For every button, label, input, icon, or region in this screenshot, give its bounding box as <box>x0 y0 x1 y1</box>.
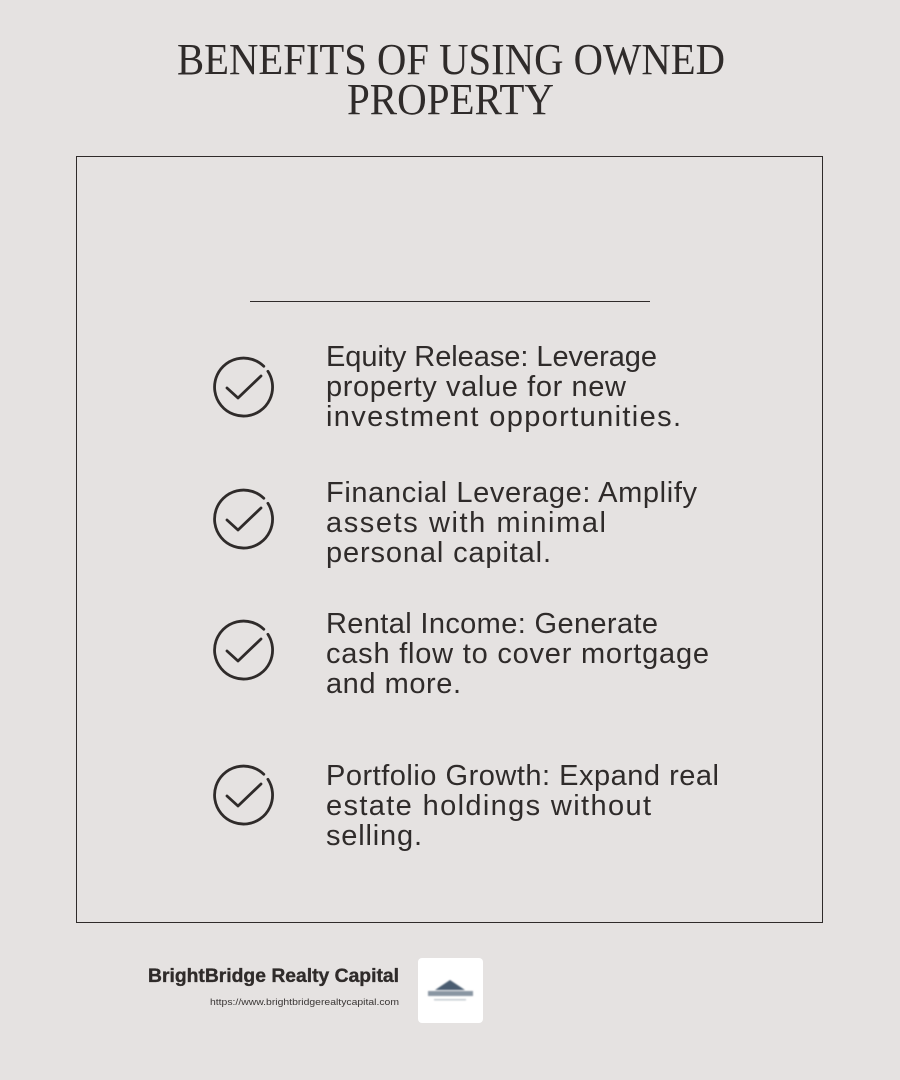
benefit: rental income <box>215 608 709 700</box>
text: equity release: property value for new <box>326 371 627 403</box>
footer: company name and url: https://www.brightbridgerealtycapital.com <box>210 997 399 1008</box>
text: financial leverage <box>326 477 698 569</box>
text: portfolio growth: Portfolio Growth: Expand real <box>326 760 719 792</box>
title <box>177 35 725 124</box>
icon: check circle <box>215 621 273 679</box>
benefit: financial leverage <box>215 477 698 569</box>
text: rental income: cash flow to cover mortgage <box>326 638 709 670</box>
text: financial leverage: Financial Leverage: Amplify <box>326 477 698 509</box>
panel: benefits frame <box>76 156 822 922</box>
text: rental income: and more. <box>326 668 461 700</box>
text: equity release: investment opportunities. <box>326 401 681 433</box>
footer: company name and url: BrightBridge Realty Capital <box>148 966 399 987</box>
text: portfolio growth: estate holdings without <box>326 790 651 822</box>
benefit: portfolio growth <box>215 760 719 852</box>
title: BENEFITS OF USING OWNED <box>177 35 725 84</box>
title: PROPERTY <box>347 75 554 124</box>
icon: check circle <box>215 766 273 824</box>
text: equity release <box>326 341 681 433</box>
text: equity release: Equity Release: Leverage <box>326 341 657 373</box>
text: financial leverage: assets with minimal <box>326 507 606 539</box>
text: rental income: Rental Income: Generate <box>326 608 658 640</box>
text: portfolio growth: selling. <box>326 820 422 852</box>
icon: company logo <box>418 958 483 1023</box>
text: portfolio growth <box>326 760 719 852</box>
divider line <box>250 301 650 302</box>
text: financial leverage: personal capital. <box>326 537 551 569</box>
icon: check circle <box>215 358 273 416</box>
footer: company name and url <box>148 966 399 1008</box>
text: rental income <box>326 608 709 700</box>
benefit: equity release <box>215 341 681 433</box>
icon: check circle <box>215 490 273 548</box>
